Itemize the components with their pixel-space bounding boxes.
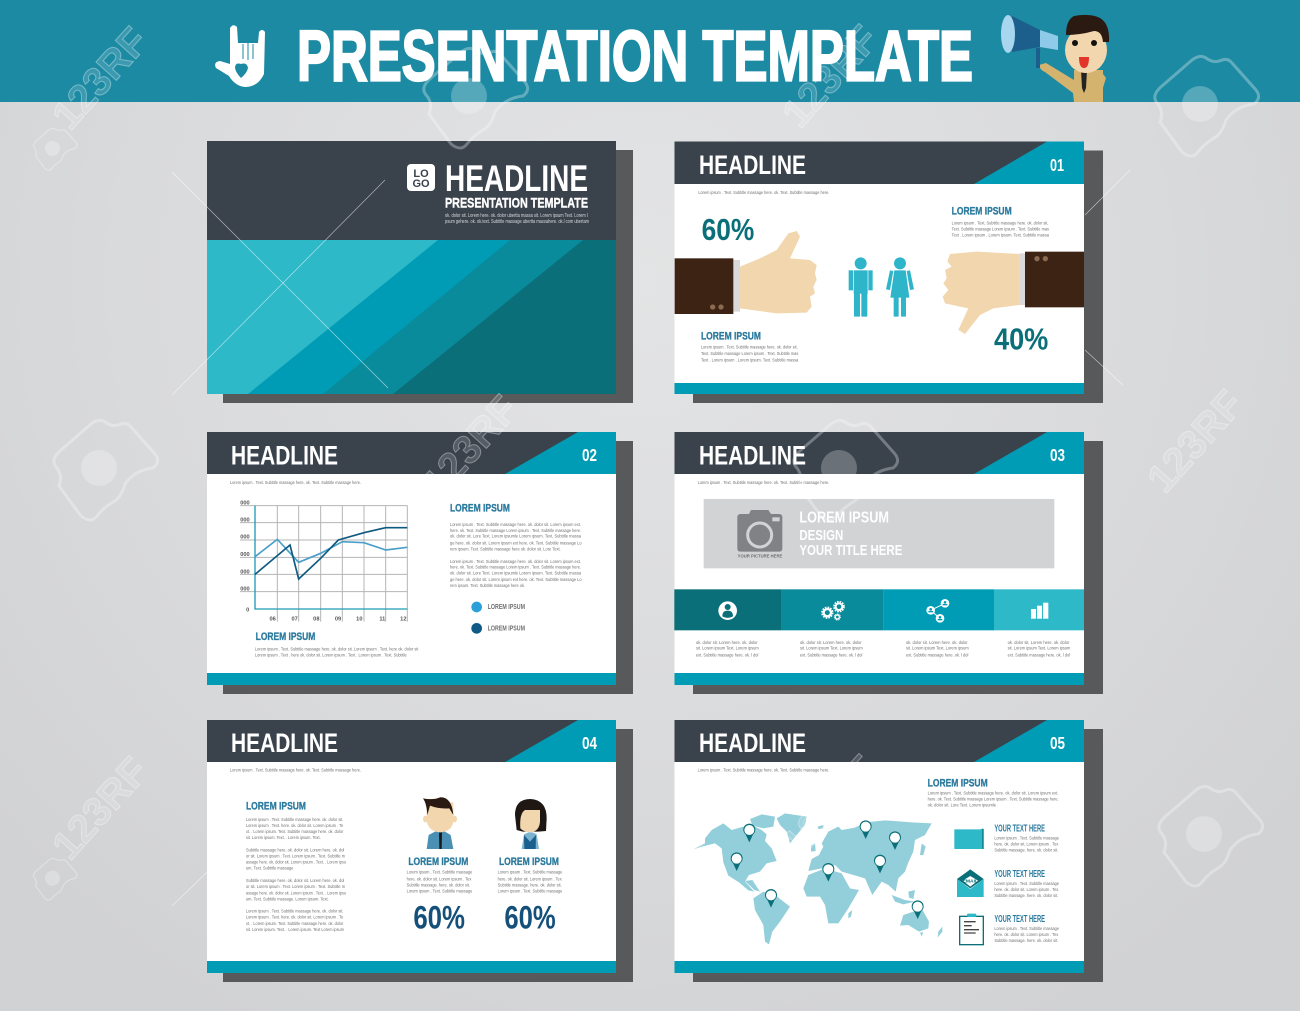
icon: female figure xyxy=(886,257,914,317)
content 02: here. ok. Text. Subtitle massage Lorem ipsum . Text. Subtitle massage here. xyxy=(450,528,581,534)
line chart: 000 xyxy=(240,586,250,592)
content 05: ok. dolor sit. Lore Text. Lorem ipsumle xyxy=(928,803,996,809)
content 01: Text. Subtitle massage Lorem ipsum . Text. Subtitle mas xyxy=(952,227,1049,233)
column text: ok. dolor sit. Lorem here. ok. dolor xyxy=(800,640,862,646)
icon: share network xyxy=(926,599,949,623)
content 04: here. ok. dolor sit. Lorem ipsum . Tex xyxy=(498,876,562,882)
content 04: or sit. Lorem ipsum . Text. Lorem ipsum . Text. Subtitle m xyxy=(246,854,345,860)
icon: folder xyxy=(954,828,984,849)
map text block: LOREM IPSUM xyxy=(928,777,988,789)
content 04: Lorem ipsum . Text. Subtitle massage xyxy=(407,870,473,876)
content 04: sit. Lorem ipsum. Text. . Lorem ipsum. Text. xyxy=(246,835,321,841)
content 01: Lorem ipsum . Text. Subtitle massage here. ok. Text. Subtitle massage here. xyxy=(698,190,829,196)
content 01: Text . Lorem ipsum . Lorem ipsum. Text. Subtitle massa xyxy=(952,233,1049,239)
headline 05: HEADLINE xyxy=(699,728,806,758)
content 02: rem ipsum. Text. Subtitle massage here ok. xyxy=(450,583,525,589)
content 05: Lorem ipsum . Text. Subtitle massage xyxy=(994,836,1059,842)
content 04: Lorem ipsum . Text. Subtitle massage here. ok. Text. Subtitle massage here. xyxy=(230,768,361,774)
content 04: assage here. ok. dolor sit. Lorem ipsum . Text. . Lorem ipsu xyxy=(246,890,346,896)
content 02: Lorem ipsum . Text. Subtitle massage here. ok. dolor sit. Lorem ipsum . Text. here ok. dolor sit xyxy=(255,646,419,652)
caption right: LOREM IPSUM xyxy=(952,206,1012,218)
picture placeholder: DESIGN xyxy=(799,528,843,544)
avatar: man xyxy=(423,797,457,849)
content 04: Subtitle massage. here. ok. dolor sit. xyxy=(407,882,470,888)
content 01 xyxy=(675,190,1084,364)
icon strip xyxy=(674,589,1084,630)
line chart: 10 xyxy=(356,617,362,623)
chart legend: LOREM IPSUM xyxy=(488,604,525,611)
icon: man with megaphone xyxy=(1001,15,1109,102)
line chart: 000 xyxy=(240,500,250,506)
left text block: LOREM IPSUM xyxy=(246,800,306,812)
line chart: 000 xyxy=(240,518,250,524)
line chart: 000 xyxy=(240,535,250,541)
world map xyxy=(693,813,942,944)
stat 60%: 60% xyxy=(702,212,754,247)
content 04: um. Text. Subtitle massage. Lorem ipsum. Text. xyxy=(246,896,329,902)
content 05: here. ok. dolor sit. Lorem ipsum . Tex xyxy=(994,887,1059,893)
content 05: Subtitle massage. here. ok. dolor sit. xyxy=(994,848,1058,854)
right text block: LOREM IPSUM xyxy=(450,503,510,515)
content 02: Lorem ipsum . Text. Subtitle massage here. ok. dolor sit. Lorem ipsum ext. xyxy=(450,522,581,528)
content 04: xt. . Lorem ipsum. Text. Subtitle massage here. ok. dolor xyxy=(246,921,344,927)
content 02: here. ok. Text. Subtitle massage Lorem ipsum . Text. Subtitle massage here. xyxy=(450,565,581,571)
line chart: 08 xyxy=(313,617,319,623)
content 04: xt. . Lorem ipsum. Text. Subtitle massage here. ok. dolor xyxy=(246,829,344,835)
picture placeholder: YOUR PICTURE HERE xyxy=(738,554,782,559)
content 03: Lorem ipsum . Text. Subtitle massage here. ok. Text. Subtitle massage here. xyxy=(698,480,829,486)
content 05: here. ok. Text. Subtitle massage Lorem ipsum . Text. Subtitle massage here. xyxy=(928,797,1059,803)
content 02: rem ipsum. Text. Subtitle massage here ok. dolor sit. Lore Text. xyxy=(450,546,561,552)
stat 40%: 40% xyxy=(994,321,1048,356)
icon: gears xyxy=(822,602,844,620)
column text: sit. Lorem ipsum Text. Lorem ipsum xyxy=(1008,646,1070,652)
number 03: 03 xyxy=(1050,445,1065,465)
logo badge: GO xyxy=(412,178,430,190)
top banner xyxy=(0,0,1300,102)
icon: bars xyxy=(1031,603,1048,619)
column text: ok. dolor sit. Lorem here. ok. dolor xyxy=(906,640,968,646)
content 05: here. ok. dolor sit. Lorem ipsum . Tex xyxy=(994,932,1059,938)
content 01: Lorem ipsum . Text. Subtitle massage here. ok. dolor sit. xyxy=(701,345,798,351)
cover headline: HEADLINE xyxy=(445,158,588,199)
slide 03: picture and icons xyxy=(674,432,1103,694)
clipboard item text: YOUR TEXT HERE xyxy=(994,914,1045,925)
content 01: Lorem ipsum . Text. Subtitle massage here. ok. dolor sit. xyxy=(952,221,1048,227)
content 05: here. ok. dolor sit. Lorem ipsum . Tex xyxy=(994,842,1059,848)
icon: email envelope xyxy=(957,869,984,897)
content 04: Subtitle massage here. ok. dolor sit. Lorem here. ok. dol xyxy=(246,847,344,853)
line chart: 0 xyxy=(246,607,249,613)
icon: male figure xyxy=(849,257,873,317)
content 02: Lorem ipsum . Text . here ok. dolor sit. Lorem ipsum . Text . Lorem ipsum . Text. Subtitle xyxy=(255,653,407,659)
watermark overlay: 123RF xyxy=(1139,382,1252,501)
content 04: Subtitle massage here. ok. dolor sit. Lorem here. ok. dol xyxy=(246,878,344,884)
watermark overlay: 123RF xyxy=(774,747,887,866)
content 01: Text . Lorem ipsum . Lorem ipsum. Text. Subtitle massa xyxy=(701,358,799,364)
content 04: Lorem ipsum . Text. here. ok. dolor sit. Lorem ipsum . Te xyxy=(246,915,343,921)
picture placeholder xyxy=(704,499,1054,568)
content 02 xyxy=(230,480,582,659)
icon: clipboard xyxy=(960,914,983,945)
content 05: Lorem ipsum . Text. Subtitle massage here. ok. Text. Subtitle massage here. xyxy=(698,768,829,774)
chart legend xyxy=(471,602,525,634)
content 04: here. ok. dolor sit. Lorem ipsum . Tex xyxy=(407,876,472,882)
map pins xyxy=(731,820,924,919)
column text: ext. Subtitle massage here. ok. l dol xyxy=(1008,652,1070,658)
icon: camera xyxy=(737,510,782,552)
number 04: 04 xyxy=(582,733,597,753)
icon: thumb down xyxy=(943,252,1084,334)
person 1 text: LOREM IPSUM xyxy=(408,856,468,868)
content 05: Lorem ipsum . Text. Subtitle massage xyxy=(994,926,1059,932)
headline 01: HEADLINE xyxy=(699,150,806,180)
content 05 xyxy=(693,768,1059,945)
slide 01: thumbs xyxy=(674,142,1103,403)
headline 04: HEADLINE xyxy=(231,728,338,758)
line chart: 11 xyxy=(379,617,385,623)
logo badge xyxy=(407,164,435,191)
column text: ext. Subtitle massage here. ok. l dol xyxy=(696,652,758,658)
cover body text: ok. dolor sit. Lorem here. ok. dolor ubertta massa sit. Lorem ipsum Text. Lorem I xyxy=(445,213,588,219)
person 2 text: LOREM IPSUM xyxy=(499,856,559,868)
content 02: Lorem ipsum . Text. Subtitle massage here. ok. Text. Subtitle massage here. xyxy=(230,480,361,486)
chart legend: LOREM IPSUM xyxy=(488,625,525,632)
picture placeholder: YOUR TITLE HERE xyxy=(799,543,902,559)
content 02: ok. dolor sit. Lore Text. Lorem ipsumle Lorem ipsum. Text. Subtitle massa xyxy=(450,534,581,540)
line chart xyxy=(240,500,407,623)
picture placeholder: LOREM IPSUM xyxy=(799,510,889,527)
content 04: Lorem ipsum . Text. Subtitle massage here. ok. dolor sit. xyxy=(246,817,343,823)
content 01: Text. Subtitle massage Lorem ipsum . Text. Subtitle mas xyxy=(701,351,799,357)
stat 60% person 1: 60% xyxy=(413,899,465,935)
line chart: 07 xyxy=(292,617,298,623)
icon: thumb up xyxy=(675,231,817,314)
headline 03: HEADLINE xyxy=(699,440,806,470)
cover subtitle: PRESENTATION TEMPLATE xyxy=(445,194,588,210)
content 04: sit. Lorem ipsum. Text. . Lorem ipsum. Text Lorem ipsum xyxy=(246,927,344,933)
icon: love-you hand sign xyxy=(215,25,265,87)
watermark overlay: 123RF xyxy=(44,749,157,868)
content 04 xyxy=(230,768,562,935)
line chart: 000 xyxy=(240,552,250,558)
content 04: Lorem ipsum . Text. Subtitle massage xyxy=(498,870,562,876)
line chart: 000 xyxy=(240,569,250,575)
content 02: ok. dolor sit. Lore Text. Lorem ipsumle Lorem ipsum. Text. Subtitle massa xyxy=(450,570,581,576)
content 05: Subtitle massage. here. ok. dolor sit. xyxy=(994,938,1058,944)
content 02: ge here. ok. dolor sit. Lorem ipsum ext here. ok. Text. Subtitle massage Lo xyxy=(450,540,582,546)
slide 02: chart xyxy=(207,432,633,694)
content 04: um. Text. Subtitle massage xyxy=(246,866,294,872)
content 04: Lorem ipsum . Text. Subtitle massage xyxy=(407,888,473,894)
column text: sit. Lorem ipsum Text. Lorem ipsum xyxy=(906,646,969,652)
column text: ext. Subtitle massage here. ok. l dol xyxy=(906,652,968,658)
chart caption: LOREM IPSUM xyxy=(256,631,315,643)
cover body text: psum gehere. ok. ok.text. Subtitle massage ubertta massahere. ok.l com ubertam xyxy=(445,219,589,225)
content 04: assage here. ok. dolor sit. Lorem ipsum . Text. . Lorem ipsu xyxy=(246,860,346,866)
watermark overlay: 123RF xyxy=(774,17,887,136)
watermark overlay: 123RF xyxy=(414,387,527,506)
slide 04: people xyxy=(207,720,633,982)
email item text: YOUR TEXT HERE xyxy=(994,869,1045,880)
content 05: Lorem ipsum . Text. Subtitle massage xyxy=(994,881,1059,887)
line chart: 12 xyxy=(400,617,406,623)
line chart: 09 xyxy=(335,617,341,623)
cover body text xyxy=(445,213,589,225)
content 04: Lorem ipsum . Text. Subtitle massage here. ok. dolor sit. xyxy=(246,909,343,915)
number 05: 05 xyxy=(1050,733,1065,753)
content 05: Subtitle massage. here. ok. dolor sit. xyxy=(994,893,1058,899)
number 01: 01 xyxy=(1050,155,1064,175)
slide: cover xyxy=(207,141,633,403)
icon: email envelope: EMAIL xyxy=(963,878,978,884)
column text: sit. Lorem ipsum Text. Lorem ipsum xyxy=(800,646,863,652)
column text: ok. dolor sit. Lorem here. ok. dolor xyxy=(696,640,758,646)
column text: ok. dolor sit. Lorem here. ok. dolor xyxy=(1008,640,1070,646)
logo badge: LO xyxy=(413,168,429,180)
content 04: Subtitle massage. here. ok. dolor sit. xyxy=(498,882,562,888)
headline 02: HEADLINE xyxy=(231,440,338,470)
icon: person xyxy=(718,601,737,620)
column text: ext. Subtitle massage here. ok. l dol xyxy=(800,652,862,658)
title: PRESENTATION TEMPLATE xyxy=(297,18,973,96)
watermark overlay: 123RF xyxy=(44,19,157,138)
folder item text: YOUR TEXT HERE xyxy=(994,824,1045,835)
content 03 xyxy=(674,480,1084,658)
content 04: or sit. Lorem ipsum . Text. Lorem ipsum . Text. Subtitle m xyxy=(246,884,345,890)
content 04: Lorem ipsum . Text. Subtitle massage xyxy=(498,888,562,894)
slide 05: world map xyxy=(674,720,1103,982)
line chart: 06 xyxy=(270,617,276,623)
number 02: 02 xyxy=(582,445,597,465)
content 04: Lorem ipsum . Text. here. ok. dolor sit. Lorem ipsum . Te xyxy=(246,823,343,829)
content 02: Lorem ipsum . Text. Subtitle massage here. ok. dolor sit. Lorem ipsum ext. xyxy=(450,559,581,565)
content 02: ge here. ok. dolor sit. Lorem ipsum ext here. ok. Text. Subtitle massage Lo xyxy=(450,577,582,583)
avatar: woman xyxy=(515,799,547,849)
content 05: Lorem ipsum . Text. Subtitle massage here. ok. dolor sit. Lorem ipsum ext. xyxy=(928,790,1058,796)
column text xyxy=(696,640,1070,658)
column text: sit. Lorem ipsum Text. Lorem ipsum xyxy=(696,646,759,652)
caption left: LOREM IPSUM xyxy=(701,330,761,342)
stat 60% person 2: 60% xyxy=(504,899,556,935)
